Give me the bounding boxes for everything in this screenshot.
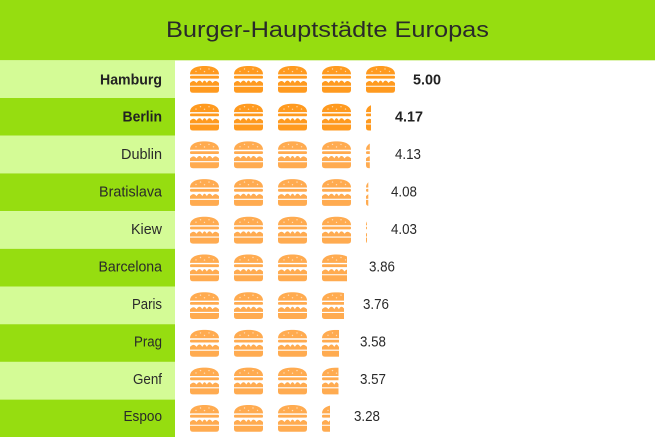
row: Genf: 3.57 bbox=[360, 372, 386, 388]
header banner bbox=[0, 0, 655, 60]
row: Prag: 3.58 bbox=[360, 334, 386, 350]
row: Hamburg: Hamburg bbox=[100, 72, 162, 88]
row: Dublin: 4.13 bbox=[395, 147, 421, 163]
row: Kiew: Kiew bbox=[131, 222, 163, 238]
row: Genf bbox=[0, 362, 386, 400]
row: Bratislava bbox=[0, 173, 417, 211]
row: Berlin: Berlin bbox=[122, 110, 162, 126]
row: Espoo: 3.28 bbox=[354, 409, 380, 425]
title: Burger-Hauptstädte Europas bbox=[166, 17, 489, 42]
row: Hamburg bbox=[0, 60, 441, 98]
row: Prag bbox=[0, 324, 386, 362]
row: Paris bbox=[0, 286, 389, 324]
row: Prag: Prag bbox=[134, 334, 162, 350]
row: Kiew bbox=[0, 211, 417, 249]
row: Dublin bbox=[0, 136, 421, 173]
row: Dublin: Dublin bbox=[121, 147, 162, 163]
row: Espoo bbox=[0, 400, 380, 437]
row: Bratislava: Bratislava bbox=[99, 184, 163, 200]
row: Espoo: Espoo bbox=[124, 409, 162, 425]
row: Berlin: 4.17 bbox=[395, 110, 423, 126]
row: Barcelona: 3.86 bbox=[369, 260, 395, 276]
row: Genf: Genf bbox=[133, 372, 163, 388]
row: Barcelona: Barcelona bbox=[98, 260, 163, 276]
row: Hamburg: 5.00 bbox=[413, 72, 441, 88]
row: Paris: Paris bbox=[132, 297, 162, 313]
row: Bratislava: 4.08 bbox=[391, 184, 417, 200]
row: Berlin bbox=[0, 98, 423, 136]
row: Barcelona bbox=[0, 249, 395, 286]
row: Paris: 3.76 bbox=[363, 297, 389, 313]
row: Kiew: 4.03 bbox=[391, 222, 417, 238]
